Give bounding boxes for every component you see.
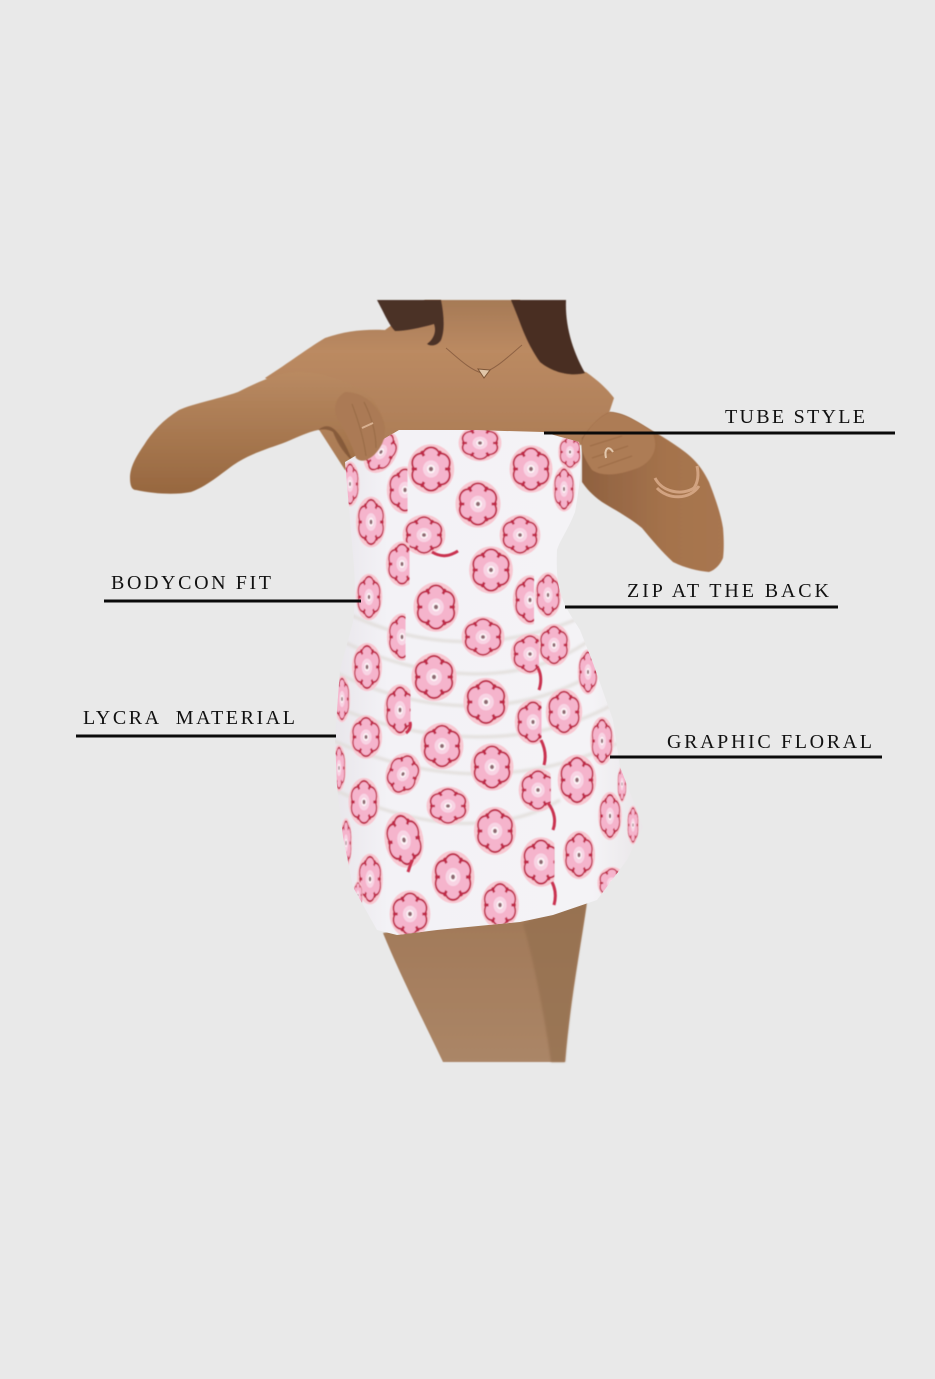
bracelet <box>655 466 699 497</box>
label: lycra material: LYCRA MATERIAL <box>83 707 295 729</box>
label: zip at the back: ZIP AT THE BACK <box>627 580 830 602</box>
floral print <box>332 425 639 938</box>
figure: model wearing floral tube dress <box>130 300 724 1062</box>
right arm <box>582 412 724 572</box>
torso, neck and shoulders <box>265 300 614 470</box>
ring right <box>605 448 613 458</box>
label: tube style: TUBE STYLE <box>725 406 865 428</box>
label: graphic floral: GRAPHIC FLORAL <box>667 731 872 753</box>
hair <box>377 300 585 374</box>
dress body <box>336 430 640 935</box>
fabric ruching folds <box>332 612 625 823</box>
infographic canvas <box>76 299 895 1064</box>
seam tails <box>406 551 555 905</box>
left finger creases <box>352 402 376 456</box>
legs <box>383 902 587 1062</box>
ring left <box>362 423 373 428</box>
necklace <box>446 345 522 373</box>
left arm and hand <box>130 372 385 494</box>
right hand <box>582 412 655 474</box>
left hand fingers over neckline <box>335 392 385 461</box>
necklace pendant <box>478 369 490 378</box>
leg shadow <box>523 904 586 1062</box>
right finger creases <box>590 436 632 468</box>
shadow under left arm <box>318 426 352 460</box>
label: bodycon fit: BODYCON FIT <box>111 572 271 594</box>
